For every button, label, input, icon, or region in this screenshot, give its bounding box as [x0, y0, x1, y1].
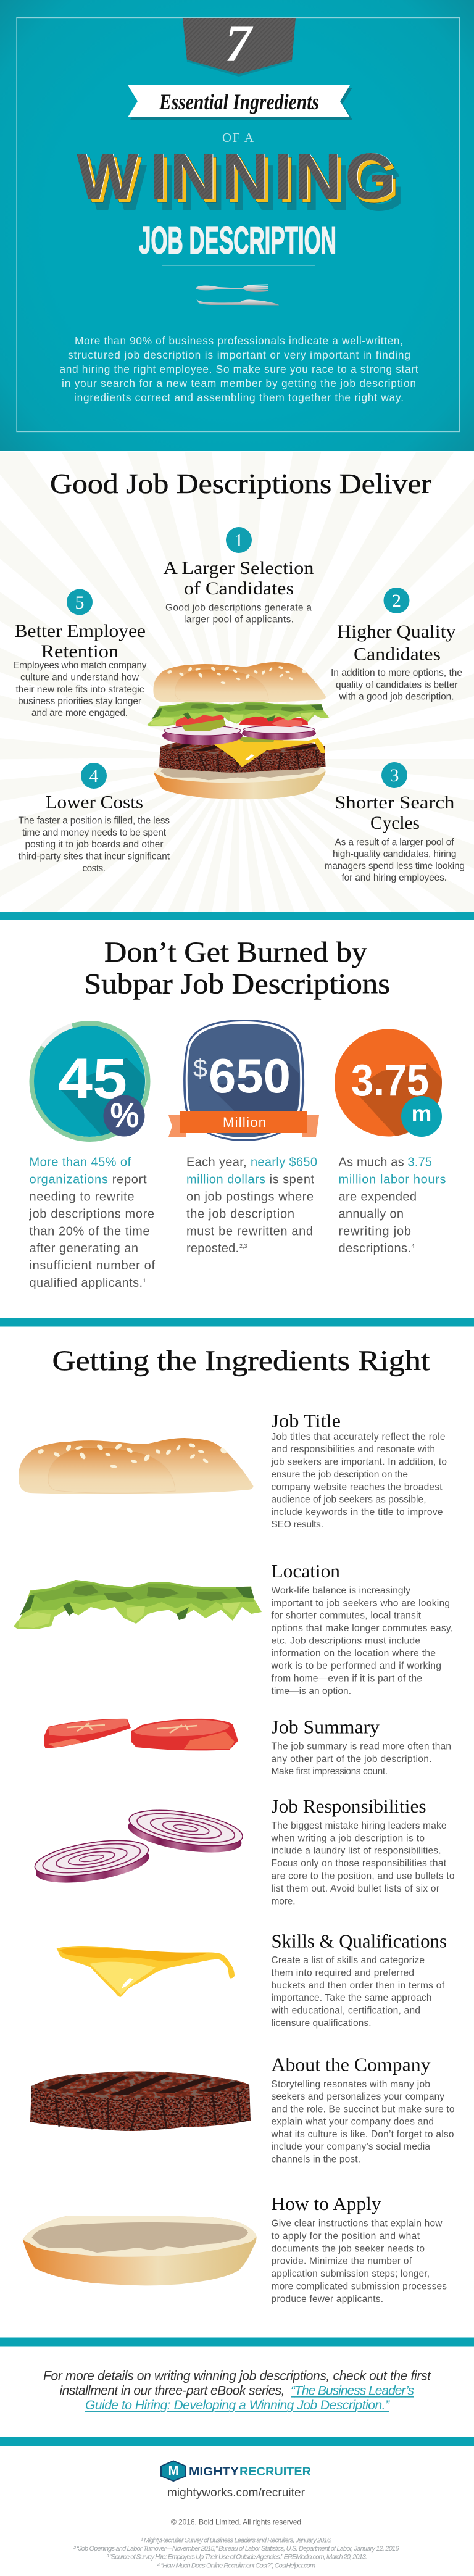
item 2: higher quality candidates: Higher Quality: [337, 621, 455, 642]
text: column 3: annually on: [338, 1207, 404, 1221]
illustration: cheese: [57, 1946, 235, 1997]
footnotes: ² “Job Openings and Labor Turnover—November 2015,” Bureau of Labor Statistics, U.S. Department of Labor, January 12, 2016: [73, 2545, 399, 2553]
item 3: shorter search cycles: managers spend less time looking: [325, 861, 465, 871]
item 5: better employee retention: and are more engaged.: [31, 708, 128, 718]
title: winning: WINNING: [85, 152, 404, 225]
heading: Subpar Job Descriptions: [84, 968, 390, 1000]
ingredient text: job responsibilities: more.: [272, 1896, 295, 1907]
item 4: lower costs: [19, 763, 170, 874]
ingredient text: job responsibilities: The biggest mistake hiring leaders make: [272, 1821, 447, 1831]
ingredient text: job title: Job Title: [272, 1410, 341, 1432]
item 5: better employee retention: 5: [75, 592, 84, 613]
item 5: better employee retention: Better Employee: [15, 621, 146, 641]
intro paragraph: [59, 334, 418, 404]
ingredient text: about the company: channels in the post.: [272, 2154, 360, 2165]
illustration: onion slices: [33, 1804, 245, 1889]
text: website: mightyworks.com/recruiter: [167, 2487, 306, 2499]
text: column 2: on job postings where: [186, 1190, 314, 1203]
item 1: larger selection: larger pool of applicants.: [184, 615, 294, 625]
ribbon: essential ingredients: Essential Ingredients: [159, 89, 319, 114]
ingredient text: about the company: what its culture is like. Don’t forget to also: [270, 2129, 454, 2140]
text: column 3: descriptions.: [338, 1242, 411, 1255]
text: column 3: As much as 3.75: [338, 1155, 432, 1169]
intro paragraph: More than 90% of business professionals indicate a well-written,: [75, 334, 403, 347]
callout: ebook link: Guide to Hiring: Developing a Winning Job Description.”: [85, 2398, 390, 2412]
ingredient text: skills and qualifications: buckets and then order then in terms of: [272, 1980, 445, 1991]
text: column 1: after generating an: [30, 1242, 138, 1255]
item 4: lower costs: posting it to job boards and other: [25, 839, 163, 850]
ingredient text: job summary: Job Summary: [272, 1716, 380, 1738]
ingredient text: job title: SEO results.: [272, 1519, 323, 1530]
heading: Don’t Get Burned by: [104, 936, 368, 968]
text: column 1: job descriptions more: [28, 1207, 154, 1221]
panel: don't get burned: [28, 936, 446, 1290]
text: column 2: Each year, nearly $650: [186, 1155, 317, 1169]
illustration: bottom bun: [23, 2216, 257, 2285]
item 2: higher quality candidates: quality of candidates is better: [336, 680, 458, 690]
ingredient text: how to apply: to apply for the position and what: [272, 2231, 420, 2242]
item 2: higher quality candidates: with a good job description.: [338, 691, 454, 702]
callout: ebook link: For more details on writing winning job descriptions, check out the first: [43, 2369, 431, 2383]
illustration: top bun: [19, 1438, 253, 1494]
stat: 650 million: Million: [223, 1115, 266, 1130]
text: column 2: the job description: [186, 1207, 294, 1221]
stat: 45 percent: [32, 1023, 151, 1141]
panel: header: [0, 0, 474, 451]
text: column 3: [338, 1155, 446, 1255]
ingredient text: job responsibilities: Job Responsibilities: [272, 1795, 426, 1817]
ingredient text: job responsibilities: include a laundry list of responsibilities.: [272, 1845, 441, 1856]
ribbon: essential ingredients: [128, 85, 352, 120]
heading: Good Job Descriptions Deliver: [50, 468, 431, 499]
ingredient text: job responsibilities: [270, 1795, 454, 1907]
ingredient text: job title: audience of job seekers as possible,: [272, 1495, 426, 1505]
ingredient text: location: time—is an option.: [272, 1686, 351, 1697]
text: column 1: More than 45% of: [30, 1155, 131, 1169]
ingredient text: job summary: any other part of the job description.: [272, 1754, 432, 1764]
ingredient text: skills and qualifications: them into required and preferred: [272, 1967, 414, 1979]
ingredient text: skills and qualifications: Create a list of skills and categorize: [272, 1955, 425, 1966]
ingredient text: about the company: and the role. Be succinct but make sure to: [272, 2104, 454, 2114]
ingredient text: job responsibilities: are core to the position, and use bullets to: [272, 1871, 454, 1881]
title: winning: WINNING: [77, 140, 396, 213]
item 3: shorter search cycles: for and hiring employees.: [342, 873, 447, 883]
icon: number badge: 7: [225, 14, 253, 73]
icon: number badge: [183, 14, 296, 77]
title: winning: WINNING: [77, 140, 396, 213]
ingredient text: location: for shorter commutes, local transit: [272, 1611, 422, 1621]
text: column 1: insufficient number of: [30, 1259, 155, 1273]
ingredient text: location: Location: [272, 1560, 340, 1582]
ingredient text: about the company: [270, 2054, 454, 2165]
illustration: assembled burger: [147, 662, 329, 799]
item 3: shorter search cycles: Shorter Search: [335, 792, 454, 813]
ingredient text: about the company: explain what your company does and: [272, 2117, 434, 2127]
title: job description: JOB DESCRIPTION: [139, 220, 336, 262]
ingredient text: job responsibilities: Focus only on those responsibilities that: [272, 1858, 447, 1869]
item 2: higher quality candidates: In addition to more options, the: [331, 668, 462, 678]
item 2: higher quality candidates: Candidates: [354, 644, 441, 664]
callout: ebook link: “The Business Leader’s: [291, 2383, 415, 2398]
ingredient text: about the company: About the Company: [272, 2054, 431, 2075]
text: column 2: million dollars is spent: [186, 1173, 314, 1186]
ingredient text: how to apply: How to Apply: [272, 2193, 381, 2214]
ingredient text: skills and qualifications: with educational, certification, and: [270, 2006, 420, 2016]
footnotes: ³ “Source of Survey Hire: Employers Up Their Use of Outside Agencies,” EREMedia.com, March 20, 2013.: [106, 2554, 367, 2561]
ingredient text: job title: include keywords in the title to improve: [272, 1507, 443, 1518]
text: column 2: reposted.: [186, 1242, 239, 1255]
heading: Getting the Ingredients Right: [52, 1345, 430, 1377]
callout: ebook link: [43, 2369, 431, 2412]
item 3: shorter search cycles: high-quality candidates, hiring: [333, 849, 457, 859]
text: of a: OF A: [222, 130, 254, 145]
item 1: larger selection: of Candidates: [184, 578, 294, 599]
item 1: larger selection: Good job descriptions generate a: [165, 602, 312, 613]
item 3: shorter search cycles: As a result of a larger pool of: [335, 837, 454, 848]
stat: 650 million: $: [193, 1053, 207, 1082]
ingredient text: skills and qualifications: Skills & Qualifications: [272, 1930, 447, 1951]
item 4: lower costs: time and money needs to be spent: [22, 828, 167, 838]
ingredient text: location: from home—even if it is part of the: [272, 1674, 422, 1684]
ingredient text: job summary: [272, 1716, 451, 1777]
ingredient text: location: [270, 1560, 453, 1697]
ingredient text: job responsibilities: when writing a job description is to: [270, 1833, 425, 1844]
ingredient text: location: Work-life balance is increasingly: [272, 1585, 410, 1596]
stat: 3.75 million: 3.75: [351, 1056, 429, 1105]
ingredient text: location: options that make longer commutes easy,: [272, 1623, 453, 1634]
stat: 650 million: [168, 1020, 319, 1142]
item 5: better employee retention: culture and understand how: [20, 673, 139, 683]
item 1: larger selection: 1: [235, 531, 243, 551]
logo: mightyrecruiter: MIGHTY: [189, 2466, 239, 2478]
callout: ebook link: installment in our three-part eBook series,: [59, 2383, 285, 2398]
text: column 1: 1: [143, 1278, 146, 1284]
intro paragraph: structured job description is important or very important in finding: [68, 349, 410, 361]
text: column 3: are expended: [338, 1190, 417, 1203]
text: column 1: qualified applicants.: [30, 1276, 143, 1290]
illustration: tomato slices: [44, 1719, 238, 1750]
footnotes: ⁴ “How Much Does Online Recruitment Cost?”, CostHelper.com: [157, 2562, 315, 2570]
item 1: larger selection: A Larger Selection: [163, 558, 314, 578]
ingredient text: job title: Job titles that accurately reflect the role: [272, 1432, 446, 1442]
intro paragraph: in your search for a new team member by getting the job description: [62, 377, 416, 389]
ingredient text: skills and qualifications: licensure qualifications.: [272, 2018, 372, 2029]
footnotes: ¹ MightyRecruiter Survey of Business Leaders and Recruiters, January 2016.: [141, 2537, 332, 2544]
item 4: lower costs: third-party sites that incur significant: [19, 852, 170, 862]
item 5: better employee retention: [13, 589, 147, 718]
item 4: lower costs: The faster a position is filled, the less: [19, 816, 170, 826]
item 2: higher quality candidates: 2: [392, 591, 401, 611]
logo: mightyrecruiter: RECRUITER: [239, 2466, 311, 2478]
ingredient text: about the company: Storytelling resonates with many job: [272, 2079, 430, 2090]
ingredient text: job summary: Make first impressions count.: [272, 1766, 388, 1777]
ingredient text: how to apply: produce fewer applicants.: [272, 2294, 383, 2304]
ingredient text: about the company: include your company’s social media: [272, 2142, 430, 2152]
item 5: better employee retention: business priorities stay longer: [18, 696, 141, 707]
text: column 1: [28, 1155, 155, 1290]
ingredient text: location: important to job seekers who are looking: [272, 1598, 450, 1608]
item 5: better employee retention: their new role fits into strategic: [16, 684, 144, 695]
intro paragraph: ingredients correct and assembling them together the right way.: [74, 391, 404, 404]
ingredient text: skills and qualifications: importance. Take the same approach: [272, 1993, 432, 2003]
ingredient text: job title: company website reaches the broadest: [272, 1482, 443, 1492]
logo: mightyrecruiter: M: [168, 2464, 178, 2478]
ingredient text: job title: job seekers are important. In addition, to: [270, 1456, 447, 1468]
logo: mightyrecruiter: [161, 2461, 311, 2481]
item 3: shorter search cycles: Cycles: [370, 813, 420, 833]
ingredient text: about the company: seekers and personalizes your company: [272, 2092, 444, 2102]
item 3: shorter search cycles: 3: [390, 765, 399, 786]
intro paragraph: and hiring the right employee. So make sure you race to a strong start: [59, 363, 418, 375]
icon: knife: [196, 299, 279, 306]
item 3: shorter search cycles: [325, 762, 465, 883]
text: column 1: organizations report: [30, 1173, 147, 1186]
ingredient text: location: work is to be performed and if working: [270, 1661, 441, 1671]
item 4: lower costs: 4: [89, 766, 99, 786]
stat: 650 million: 650: [209, 1049, 291, 1103]
text: column 2: [186, 1155, 317, 1255]
ingredient text: how to apply: Give clear instructions that explain how: [272, 2218, 443, 2229]
stat: 3.75 million: m: [412, 1101, 431, 1126]
footnotes: [73, 2537, 399, 2570]
ingredient text: location: information on the location where the: [272, 1648, 436, 1659]
item 2: higher quality candidates: [331, 588, 462, 702]
panel: good job descriptions deliver: [13, 468, 465, 975]
text: column 3: million labor hours: [338, 1173, 446, 1186]
item 4: lower costs: costs.: [83, 863, 106, 874]
text: column 3: rewriting job: [338, 1224, 411, 1238]
text: column 1: than 20% of the time: [30, 1224, 149, 1238]
illustration: patty: [30, 2072, 251, 2131]
ingredient text: job title: ensure the job description on the: [272, 1469, 408, 1480]
item 5: better employee retention: Retention: [41, 641, 118, 662]
title: winning: WINNING: [80, 144, 399, 217]
ingredient text: how to apply: provide. Minimize the number of: [272, 2256, 412, 2266]
ingredient text: job title: [270, 1410, 447, 1530]
stat: 3.75 million: [335, 1029, 444, 1139]
ingredient text: how to apply: more complicated submission processes: [272, 2281, 447, 2292]
text: column 3: 4: [411, 1243, 415, 1249]
stat: 45 percent: 45: [58, 1047, 127, 1110]
ingredient text: how to apply: documents the job seeker needs to: [272, 2244, 425, 2254]
ingredient text: how to apply: [272, 2193, 447, 2304]
text: column 2: must be rewritten and: [186, 1224, 313, 1238]
ingredient text: how to apply: application submission steps; longer,: [272, 2269, 430, 2279]
item 5: better employee retention: Employees who match company: [13, 660, 147, 671]
ingredient text: job summary: The job summary is read more often than: [272, 1742, 451, 1751]
text: copyright: © 2016, Bold Limited. All rights reserved: [171, 2518, 301, 2527]
heading: [84, 936, 390, 1000]
ingredient text: job title: and responsibilities and resonate with: [272, 1444, 435, 1455]
ingredient text: job responsibilities: list them out. Avoid bullet lists of six or: [272, 1884, 439, 1894]
ingredient text: location: etc. Job descriptions must include: [272, 1635, 420, 1647]
text: column 1: needing to rewrite: [30, 1190, 135, 1203]
text: column 2: 2,3: [239, 1243, 247, 1249]
item 4: lower costs: Lower Costs: [46, 792, 143, 812]
panel: getting the ingredients right: [14, 1345, 454, 2304]
item 1: larger selection: [163, 527, 314, 625]
ingredient text: skills and qualifications: [270, 1930, 447, 2029]
illustration: lettuce: [14, 1580, 262, 1629]
stat: 45 percent: %: [110, 1095, 139, 1134]
icon: fork: [196, 284, 268, 292]
